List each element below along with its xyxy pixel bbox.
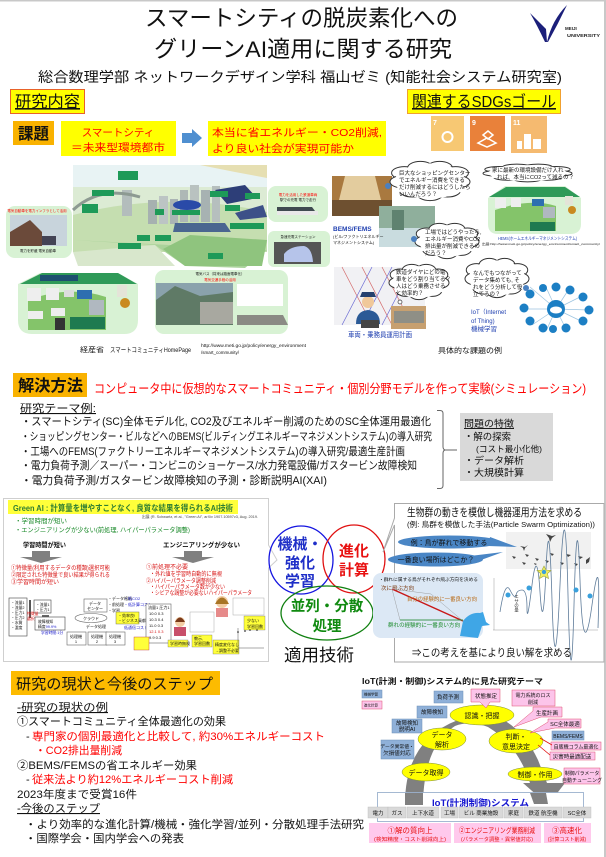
goal boxes: (計算コスト削減)	[548, 836, 586, 843]
gray arch arrow	[405, 715, 565, 805]
icons: SDG goals 7, 9, 11: 11	[513, 120, 521, 127]
diagram: cloud processing: センター	[87, 605, 103, 611]
callout: train: 駅での充電 電力で走行	[280, 197, 316, 202]
heading: IoT(計測・制御)システム的に見た研究テーマ	[362, 676, 543, 686]
callout: question: 本当に省エネルギー・CO2削減,	[212, 126, 382, 139]
text block: current status	[17, 700, 364, 845]
text block: current status: -今後のステップ	[17, 801, 100, 815]
callout: EV: 電気自動車を電力インフラとして活用	[7, 208, 67, 213]
theme boxes: machine learning: BEMS/FEMS	[553, 734, 583, 740]
diagram: data table and people: 教示,	[194, 635, 203, 641]
stage ellipses	[402, 705, 562, 781]
column: short training time	[11, 540, 110, 586]
diagram: features: ・濃度	[11, 625, 23, 630]
column: short training time: ①特徴量(利用するデータの種類)選択可能	[11, 564, 110, 572]
panel: bird direction explanation: 群れの経験的に一番良い方向	[388, 621, 460, 629]
diagram: data table and people: 10.3 0.4	[149, 617, 164, 622]
theme boxes: evolutionary computation	[471, 689, 602, 784]
diagram: cloud processing: ・学習	[108, 607, 120, 613]
diagram: features: ・流量2	[11, 605, 25, 610]
text block: current status: ・CO2排出量削減	[35, 743, 122, 757]
text block: current status: -研究の現状の例	[17, 700, 108, 714]
text block: research themes	[20, 401, 432, 487]
chart: train schedule diagram	[334, 267, 425, 325]
panel: bird direction explanation: ・群れに属する鳥がそれぞれ飛ぶ方向を決める	[379, 576, 478, 583]
callout: station: 急速充電ステーション	[281, 234, 316, 239]
column: less engineering	[146, 540, 252, 597]
stage ellipses: データ	[432, 730, 452, 739]
speech bubble: IoT: データ集めても, そ	[473, 276, 520, 284]
diagram: IoT research themes	[362, 676, 602, 843]
callout: station	[268, 231, 330, 267]
speech bubble: IoT: れをどう分析して役	[473, 283, 523, 291]
label: IoT: IoT（Internet	[471, 309, 506, 316]
subtitle: 総合数理学部 ネットワークデザイン学科 福山ゼミ (知能社会システム研究室)	[38, 69, 562, 85]
column: less engineering: ①前処理不必要	[146, 563, 188, 571]
stage ellipses: 意思決定	[502, 742, 530, 751]
application domains: 家庭	[508, 809, 519, 817]
diagram: cloud processing: ・データ格納	[108, 595, 132, 601]
label: BEMS/FEMS: (ビル/ファクトリエネルギー	[333, 233, 383, 239]
diagram: data table and people: →調整不必要	[215, 647, 239, 653]
callout: smart city	[61, 121, 176, 156]
callout: smart city: スマートシティ	[82, 127, 154, 139]
callout: question: より良い社会が実現可能か	[212, 142, 355, 155]
stage ellipses: 判断・	[506, 732, 526, 741]
heading: current status and next steps	[11, 671, 220, 695]
callout: EV	[6, 206, 72, 258]
caption: HEMS: 出展:http://www.meti.go.jp/policy/energy_environment/smart_community/	[482, 241, 600, 246]
icons: SDG goals 7, 9, 11: 7	[433, 120, 437, 127]
label: BEMS/FEMS: マネジメントシステム)	[333, 239, 375, 245]
circle: parallel and distributed processing: 処理	[312, 618, 342, 635]
diagram: cloud processing: ・低計算コスト	[124, 601, 152, 607]
stage ellipses: 解析	[435, 740, 449, 749]
speech bubble: mall: 巨大なショッピングセンター	[399, 169, 471, 177]
diagram: cloud processing: ・低CO2	[124, 595, 141, 601]
text: source: http://www.meti.go.jp/policy/energy_environment	[201, 343, 307, 348]
theme boxes: evolutionary computation: 災害時最適配送	[553, 752, 592, 760]
panel: concrete problem examples	[332, 161, 600, 355]
circle: machine and reinforcement learning: 機械・	[277, 536, 323, 553]
caption: HEMS: HEMS(ホームエネルギーマネジメントシステム)	[498, 236, 577, 242]
text block: research themes: ・スマートシティ(SC)全体モデル化, CO2及びエネルギー削減のためのSC全体運用最適化	[21, 414, 431, 428]
speech bubble: mall: でエネルギー消費をできる	[399, 176, 465, 184]
application domains: 上下水道	[412, 809, 434, 817]
stage ellipses: データ取得	[408, 768, 444, 777]
diagram: cloud processing: 処理機	[70, 633, 82, 639]
diagram: cloud processing: データ処理	[86, 623, 106, 629]
photo: shopping mall	[332, 176, 392, 216]
diagram: features: 特徴量	[27, 611, 39, 616]
goal boxes: ②エンジニアリング業務削減	[459, 825, 535, 835]
theme boxes: evolutionary computation: 自販機コラム最適化	[554, 744, 598, 750]
text block: research themes: ・電力負荷予測／スーパー・コンビニのショーケース/水力発電設備/ガスタービン故障検知	[21, 458, 417, 472]
title: スマートシティの脱炭素化への	[145, 6, 458, 31]
heading: related SDGs goals	[408, 90, 560, 114]
circle: machine and reinforcement learning	[269, 526, 333, 594]
heading: research content: 研究内容	[15, 93, 80, 111]
application domains: 鉄道 航空機	[528, 809, 558, 817]
circle: machine and reinforcement learning: 強化	[285, 555, 315, 572]
speech bubble: factory: エネルギー消費やCO2	[425, 235, 480, 243]
heading: Green AI: Green AI : 計算量を増やすことなく, 良質な結果を得られるAI技術	[13, 503, 233, 513]
panel: problem characteristics: ・データ解析	[464, 455, 525, 467]
panel: bird direction explanation: 自分の経験的に一番良い方向	[407, 595, 477, 603]
column: short training time: 学習時間が短い	[23, 540, 66, 549]
theme boxes: machine learning: 故障検知	[396, 719, 418, 727]
text block: current status: ・より効率的な進化計算/機械・強化学習/並列・分散処理手法研究	[25, 817, 364, 831]
diagram: cloud processing: 処理機	[109, 633, 121, 639]
application domains: 電力	[372, 809, 384, 817]
application domains: ビル 商業施設	[464, 809, 499, 817]
legend: 機械学習	[364, 692, 378, 696]
goal boxes: (検知精度・コスト削減向上)	[374, 836, 446, 843]
text: source: スマートコミュニティHomePage	[110, 346, 191, 354]
speech bubble: IoT	[465, 258, 529, 298]
heading: solution	[13, 373, 87, 397]
diagram: features: 故障検知	[38, 619, 53, 624]
icon: Meiji University logo: MEIJI	[565, 26, 577, 31]
speech ellipse: flock moves: 例：鳥が群れで移動する	[411, 538, 487, 547]
callout: electric bus: 電気交通手段の活用	[204, 277, 236, 282]
goal boxes: (パラメータ調整・異常値対応)	[461, 836, 533, 843]
stage ellipses: 制御・作用	[518, 770, 552, 779]
heading: related SDGs goals: 関連するSDGsゴール	[412, 92, 556, 111]
panel: problem characteristics: (コスト最小化他)	[476, 444, 542, 454]
diagram: data table and people: 流量1 圧力1	[148, 604, 170, 610]
text block: research themes: ・電力負荷予測/ガスタービン故障検知の予測・診断説明AI(XAI)	[21, 473, 327, 487]
diagram: cloud processing: クラウド	[83, 615, 99, 621]
label: IoT: 機械学習	[471, 324, 497, 333]
text block: current status: -	[26, 774, 30, 786]
title	[145, 6, 458, 62]
speech bubble: train schedule: 車をどう割り当てる？	[396, 275, 451, 283]
label: applied technologies: 適用技術	[284, 646, 354, 665]
application domains	[368, 807, 591, 818]
speech bubble: home: 家に最新の環境設備だけ入れ	[492, 166, 564, 174]
theme boxes: evolutionary computation: 生産計画	[536, 709, 558, 717]
diagram: cloud processing: ・効率良!	[118, 612, 135, 618]
callout: EV: 電力を貯蔵 電気自動車	[20, 248, 56, 253]
column: less engineering: ・ハイパーパラメータ数が少ない	[150, 583, 225, 591]
icon: conductor	[356, 292, 380, 328]
speech bubble: factory: だろう？	[425, 250, 447, 257]
speech bubble: mall: いいんだろう？	[399, 191, 437, 198]
speech bubble: train schedule: と効率的？	[396, 289, 424, 297]
text: source	[80, 343, 307, 355]
diagram: features: ・流量1	[11, 600, 25, 605]
heading: problem	[13, 121, 54, 145]
conclusion text: ⇒この考えを基により良い解を求める	[412, 646, 572, 659]
label: IoT: of Thing)	[471, 319, 495, 325]
diagram: data table and people: 9.9 0.3	[149, 635, 162, 640]
theme boxes: machine learning: 負荷予測	[437, 693, 459, 701]
theme boxes: evolutionary computation: 削減	[528, 699, 538, 706]
text block: current status: 2023年度まで受賞16件	[17, 787, 137, 801]
diagram: cloud processing: 3	[114, 639, 117, 644]
diagram: features: ・流量1	[36, 602, 50, 607]
diagram: data table and people: 学習時無視	[170, 640, 190, 646]
caption: examples: 具体的な課題の例	[438, 345, 502, 355]
application domains: ガス	[391, 809, 403, 817]
column: short training time: ②限定された特徴量で良い結果が得られる	[11, 571, 110, 579]
theme boxes: machine learning: 故障検知	[421, 708, 443, 716]
icon: Meiji University logo	[530, 5, 600, 42]
speech bubble: IoT: なんでもつながって	[473, 269, 522, 277]
bracket	[437, 410, 457, 488]
speech bubble: home: れば、本当にCO2って減るの？	[497, 173, 574, 181]
callout: question	[208, 121, 386, 156]
text: source: 経産省	[80, 345, 104, 354]
photo: bird flock	[506, 532, 591, 569]
text block: current status: ①スマートコミュニティ全体最適化の効果	[17, 714, 226, 728]
diagram: features: ・水質	[11, 620, 23, 625]
goal boxes: ①解の質向上	[388, 825, 433, 835]
icons: SDG goals 7, 9, 11	[431, 116, 547, 153]
callout: train: 電力を活用した鉄道車両	[279, 192, 318, 197]
heading: Green AI	[8, 500, 238, 514]
callout: electric bus	[155, 270, 288, 334]
icon: IoT cloud network	[520, 282, 594, 333]
diagram: features	[9, 598, 65, 636]
speech bubble: IoT: 立てるの？	[473, 290, 501, 298]
diagram: data table and people: 11.0 0.3	[149, 623, 164, 628]
points: ・エンジニアリングが少ない(前処理, ハイパーパラメータ調整)	[15, 525, 190, 534]
panel: problem characteristics: 問題の特徴	[464, 418, 515, 430]
diagram: cloud processing: 低通信コスト	[124, 624, 148, 630]
diagram: data table and people: 学習回数	[247, 623, 263, 629]
diagram: data table and people: 10.0 0.3	[149, 611, 164, 616]
diagram: data table and people: 少ない	[247, 617, 259, 623]
circle: machine and reinforcement learning: 学習	[285, 572, 315, 590]
diagram: cloud processing: 2	[96, 639, 99, 644]
panel: bird direction explanation: 次に飛ぶ方向	[381, 584, 414, 592]
circle: evolutionary computation	[323, 525, 385, 593]
speech ellipse: flock moves	[398, 536, 517, 548]
callout: smart city: ＝未来型環境都市	[71, 141, 165, 154]
diagram: cloud processing: ・前処理	[108, 601, 124, 607]
text block: research themes: ・ショッピングセンター・ビルなどへのBEMS(ビルディングエネルギーマネジメントシステム)の導入研究	[21, 429, 432, 443]
circle: parallel and distributed processing	[281, 586, 373, 640]
circle: evolutionary computation: 計算	[339, 561, 369, 579]
heading: current status and next steps: 研究の現状と今後のステップ	[16, 676, 213, 693]
panel: smart community illustration	[6, 165, 330, 334]
theme boxes: machine learning: 欠損値対応	[383, 749, 411, 757]
illustration: HEMS house	[488, 186, 581, 234]
speech bubble: train schedule: 鉄道ダイヤにどの電	[396, 268, 446, 276]
icon: Meiji University logo: UNIVERSITY	[567, 33, 600, 38]
theme boxes: machine learning: 説明AI	[399, 725, 416, 733]
points	[15, 516, 190, 534]
column: less engineering: ・シビアな調整が必要ないハイパーパラメータ	[150, 589, 252, 597]
heading: research content	[10, 90, 84, 114]
panel: swarm optimization	[373, 504, 604, 662]
diagram: features: 学習時間:1分	[41, 630, 63, 635]
photo: factory	[379, 206, 435, 247]
points: ・学習時間が短い	[15, 516, 67, 525]
diagram: features: ・圧力1	[11, 610, 25, 615]
column: less engineering: エンジニアリングが少ない	[163, 540, 240, 549]
speech bubble: home	[483, 164, 574, 182]
panel: problem characteristics: ・解の探索	[464, 431, 511, 443]
speech ellipse: best place	[388, 552, 503, 566]
city map	[73, 165, 267, 268]
application domains: 工場	[444, 809, 455, 817]
speech bubble: train schedule: 人はどう乗務させる	[396, 282, 446, 290]
speech bubble: factory	[411, 223, 482, 259]
theme boxes: evolutionary computation: 状態推定	[475, 692, 497, 700]
text block: current status: -	[26, 731, 30, 743]
panel: problem characteristics: ・大規模計算	[464, 467, 524, 479]
diagram: features: 精度99.9%	[38, 624, 57, 629]
photo: train	[391, 306, 426, 329]
theme boxes: evolutionary computation: 制御パラメータ	[565, 770, 599, 777]
circle: evolutionary computation: 進化	[339, 543, 369, 560]
text block: research themes: 研究テーマ例:	[20, 401, 96, 415]
callout: train	[268, 186, 328, 222]
chart: search landscape curve	[493, 530, 599, 660]
application domains: SC全体	[568, 809, 587, 817]
heading: solution: 解決方法	[18, 376, 83, 395]
speech ellipse: best place: 一番良い場所はどこか？	[398, 555, 474, 564]
column: less engineering: ②ハイパーパラメータ調整削減	[146, 577, 216, 585]
icons: SDG goals 7, 9, 11: 9	[472, 120, 476, 127]
legend: 進化計算	[364, 702, 378, 708]
theme boxes: evolutionary computation: 自動チューニング	[562, 777, 602, 784]
source note: 出展 (R. Schwartz, et al., "Green AI", arXiv 1907.10597v3, Aug. 2019.	[142, 514, 258, 519]
goal boxes: ③高速化	[552, 825, 582, 835]
text block: research themes: ・工場へのFEMS(ファクトリーエネルギーマネジメントシステム)の導入研究/最適生産計画	[21, 444, 405, 458]
goal boxes	[369, 823, 591, 843]
speech bubble: factory: 工場ではどうやったら,	[425, 228, 482, 236]
diagram: data table and people: 学習回数	[194, 640, 210, 646]
chart: search landscape curve: エサの量	[514, 594, 520, 613]
panel: swarm optimization: (例: 鳥群を模倣した手法(Particle Swarm Optimization))	[407, 519, 596, 529]
IoT system box: IoT(計測制御)システム	[432, 797, 529, 808]
callout: smart house	[18, 273, 138, 334]
heading: problem: 課題	[18, 125, 49, 143]
theme boxes: machine learning: データ異常値・	[380, 743, 414, 750]
diagram: cloud processing	[67, 595, 152, 645]
theme boxes: evolutionary computation: 電力系統のロス	[515, 692, 551, 699]
speech bubble: mall	[385, 161, 471, 201]
diagram: cloud processing: ・ビジネス貢献!	[118, 617, 147, 623]
diagram: data table and people	[134, 596, 265, 654]
panel: problem characteristics	[460, 413, 553, 481]
diagram: features: 選択	[27, 616, 35, 621]
diagram: features: ・圧力2	[11, 615, 25, 620]
callout: electric bus: 電気バス（将来は路面電車化）	[196, 271, 244, 276]
stage ellipses: 認識・把握	[464, 711, 500, 720]
column: short training time: ③学習時間が短い	[11, 578, 59, 586]
diagram: data table and people: 精度変化なし	[215, 641, 239, 647]
text block: current status: ②BEMS/FEMSの省エネルギー効果	[17, 758, 197, 772]
legend	[362, 690, 382, 709]
text block: current status: 従来法より約12%エネルギーコスト削減	[32, 772, 233, 786]
label: IoT	[471, 309, 506, 333]
panel: bird direction explanation	[373, 573, 490, 638]
caption: HEMS	[482, 236, 600, 246]
speech bubble: factory: 排出量が削減できるの	[425, 242, 480, 250]
arrow	[182, 129, 202, 147]
text block: current status: 専門家の個別最適化と比較して, 約30%エネルギーコスト	[32, 729, 325, 743]
diagram: data table and people: 12.1 0.3	[149, 629, 164, 634]
diagram: cloud processing: 処理機	[91, 633, 103, 639]
diagram: cloud processing: データ	[89, 600, 101, 606]
circle: parallel and distributed processing: 並列・分散	[291, 598, 364, 615]
diagram: applied technologies circles	[269, 525, 385, 665]
theme boxes: evolutionary computation: SC全体最適	[550, 720, 580, 728]
IoT system box	[378, 792, 584, 822]
title: グリーンAI適用に関する研究	[154, 37, 452, 62]
diagram: features: ・圧力1	[36, 607, 50, 612]
diagram: cloud processing: 1	[75, 639, 78, 644]
panel: Green AI	[4, 498, 277, 662]
text: source: /smart_community/	[201, 350, 240, 355]
caption: vehicle crew schedule: 車両・乗務員運用計画	[348, 330, 412, 339]
theme boxes: machine learning	[380, 691, 584, 759]
label: BEMS/FEMS	[333, 226, 383, 245]
label: BEMS/FEMS: BEMS/FEMS	[333, 226, 372, 233]
speech bubble: train schedule	[389, 264, 451, 304]
speech bubble: mall: だけ削減するにはどうしたら	[399, 183, 471, 191]
text block: current status: ・国際学会・国内学会への発表	[25, 831, 184, 845]
column: less engineering: ・外れ値を学習時自動的に無視	[150, 570, 222, 578]
